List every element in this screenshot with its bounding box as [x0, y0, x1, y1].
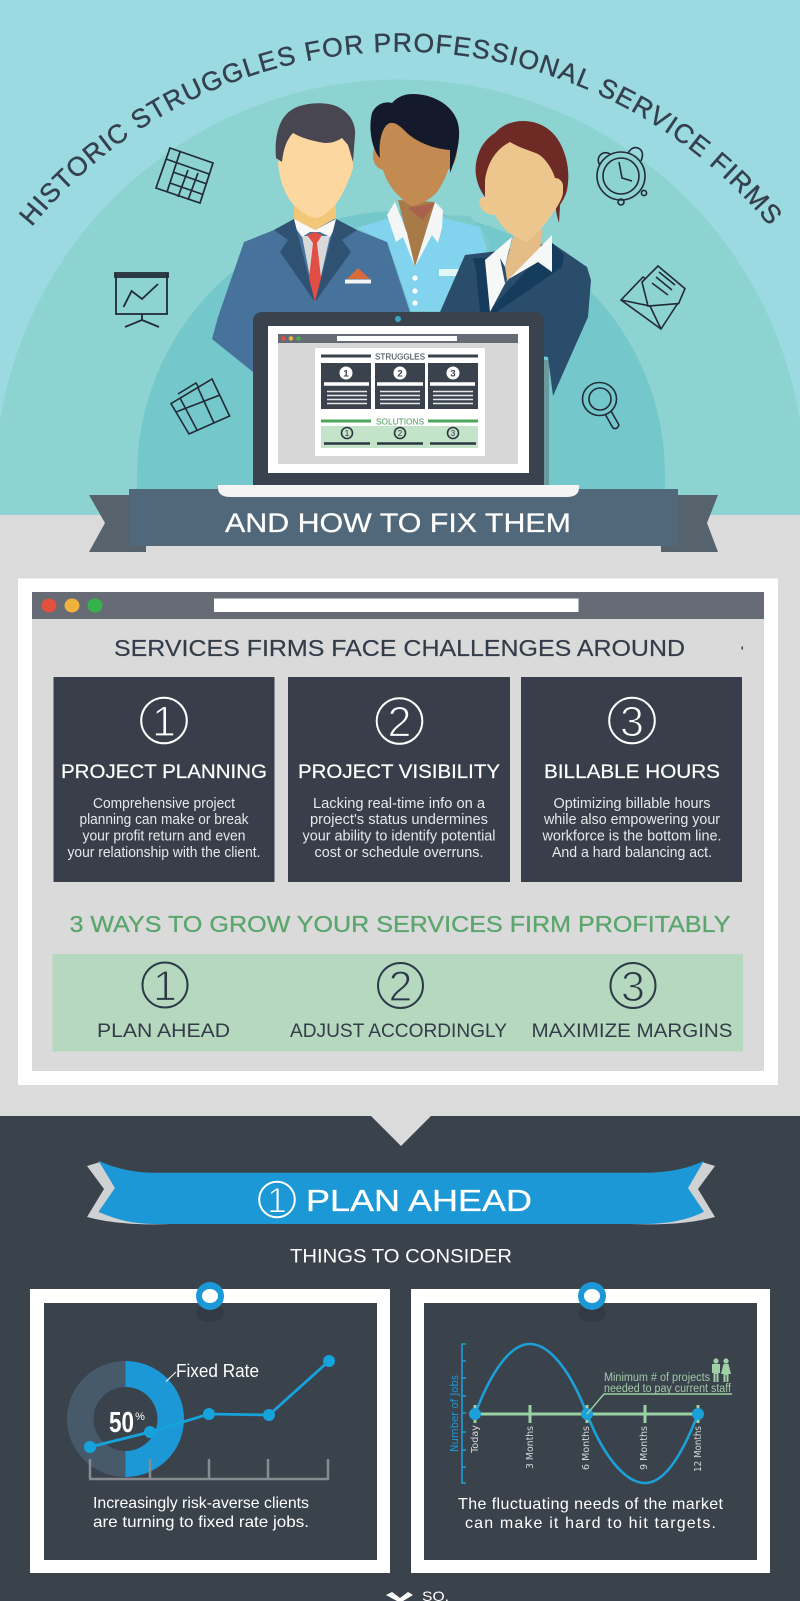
mini struggle cards: 2: [397, 368, 403, 380]
caption: Increasingly risk-averse clients: [93, 1495, 309, 1512]
card heading: PROJECT VISIBILITY: [298, 761, 500, 783]
hero sky: [0, 0, 800, 515]
x axis labels: [470, 1425, 704, 1472]
solution 1: plan ahead: [97, 962, 230, 1042]
hero backdrop arcs: [0, 79, 800, 515]
number badge 2: [377, 698, 422, 746]
card body text: Comprehensive project: [93, 796, 235, 812]
laptop screen: [268, 326, 529, 473]
ribbon: and how to fix them: [89, 485, 718, 552]
ribbon text: AND HOW TO FIX THEM: [225, 508, 571, 538]
icon: folded map: [171, 379, 230, 434]
card body text: planning can make or break: [80, 812, 249, 828]
mini solutions panel: 3: [451, 429, 456, 438]
card body text: Optimizing billable hours: [554, 796, 710, 812]
card body text: project's status undermines: [310, 812, 488, 828]
card: billable hours: [521, 677, 742, 882]
icon: alarm clock: [597, 148, 647, 205]
minimum projects callout: [587, 1372, 732, 1414]
number badge 3: [609, 698, 655, 746]
card body text: your profit return and even: [82, 828, 246, 844]
solution 3: maximize margins: 3: [621, 963, 645, 1011]
mini struggles heading: [321, 352, 478, 362]
laptop camera: [395, 316, 401, 322]
pin: [578, 1282, 606, 1322]
x axis labels: 12 Months: [693, 1426, 704, 1472]
solution 1: plan ahead: PLAN AHEAD: [97, 1020, 230, 1042]
card body text: Lacking real-time info on a: [313, 796, 486, 812]
caption: [93, 1495, 309, 1531]
icon: staff figures: [712, 1358, 731, 1382]
caption: The fluctuating needs of the market: [458, 1496, 724, 1513]
solution 2: adjust accordingly: 2: [389, 963, 412, 1011]
person: man in shirt behind: [340, 94, 490, 311]
line chart: [84, 1355, 335, 1453]
panel: fixed rate: [30, 1282, 390, 1573]
panel: market fluctuation: [411, 1282, 770, 1573]
minimum projects callout: needed to pay current staff: [604, 1383, 732, 1395]
solution 2: adjust accordingly: ADJUST ACCORDINGLY: [290, 1020, 507, 1042]
card body text: workforce is the bottom line.: [542, 828, 722, 844]
mini solutions heading: [321, 418, 478, 426]
solution 3: maximize margins: MAXIMIZE MARGINS: [532, 1020, 732, 1042]
caption: [458, 1496, 724, 1532]
mini struggle cards: 3: [450, 368, 456, 380]
x axis labels: Today: [470, 1425, 481, 1454]
icon: presentation board: [115, 273, 168, 327]
card body text: cost or schedule overruns.: [314, 845, 484, 861]
banner number: 1: [267, 1182, 287, 1220]
solution 3: maximize margins: [532, 963, 732, 1042]
chart axis: [89, 1459, 329, 1479]
card body text: And a hard balancing act.: [552, 845, 712, 861]
y axis: [449, 1344, 466, 1483]
laptop base: [218, 485, 579, 497]
mini solutions panel: 1: [345, 429, 350, 438]
caption: are turning to fixed rate jobs.: [93, 1514, 309, 1531]
number badge 3: 3: [620, 698, 644, 746]
challenges heading: SERVICES FIRMS FACE CHALLENGES AROUND: [114, 635, 685, 661]
subheading: THINGS TO CONSIDER: [290, 1246, 512, 1268]
x axis labels: 3 Months: [525, 1426, 536, 1469]
card heading: PROJECT PLANNING: [61, 761, 267, 783]
number badge 1: [141, 698, 187, 746]
donut chart: %: [135, 1411, 145, 1423]
dark background: [0, 1116, 800, 1601]
card body text: your relationship with the client.: [68, 845, 260, 861]
donut chart: 50: [109, 1407, 134, 1439]
curve markers: [469, 1408, 704, 1420]
sine curve: [475, 1344, 698, 1483]
hero panel: [0, 0, 800, 552]
banner number: [259, 1182, 295, 1220]
mini struggles heading: STRUGGLES: [375, 352, 425, 362]
icon: magnifying glass: [582, 382, 619, 429]
solution 2: adjust accordingly: [290, 963, 507, 1042]
caption: can make it hard to hit targets.: [465, 1515, 716, 1532]
title: HISTORIC STRUGGLES FOR PROFESSIONAL SERVICE FIRMS: [18, 33, 781, 226]
card body text: [302, 796, 496, 861]
x axis labels: 9 Months: [639, 1426, 650, 1470]
banner back folds: [87, 1162, 715, 1224]
card body text: [542, 796, 722, 861]
card: project visibility: [288, 677, 510, 882]
browser panel: [18, 578, 778, 1085]
solutions panel: [52, 954, 743, 1052]
person: woman in navy jacket: [440, 121, 591, 485]
card heading: BILLABLE HOURS: [544, 761, 720, 783]
arrow: section pointer: [371, 1116, 431, 1146]
card body text: your ability to identify potential: [302, 828, 496, 844]
minimum projects callout: Minimum # of projects: [604, 1372, 710, 1384]
solution 1: plan ahead: 1: [153, 962, 177, 1010]
panel frame: [30, 1289, 390, 1573]
mini solutions panel: 2: [398, 429, 403, 438]
number badge 2: 2: [388, 698, 411, 746]
panel frame: [411, 1289, 770, 1573]
mini struggle cards: [321, 363, 478, 409]
x axis labels: 6 Months: [581, 1426, 592, 1470]
browser toolbar: [32, 592, 764, 619]
card body text: while also empowering your: [543, 812, 720, 828]
laptop body: [253, 312, 544, 485]
laptop: [253, 312, 544, 485]
number badge 1: 1: [152, 698, 176, 746]
pin: [196, 1282, 224, 1322]
donut chart: [67, 1361, 184, 1477]
dark section: [0, 1116, 800, 1601]
banner text: PLAN AHEAD: [306, 1184, 532, 1218]
green heading: 3 WAYS TO GROW YOUR SERVICES FIRM PROFITABLY: [70, 911, 731, 937]
banner ribbon: [98, 1161, 704, 1224]
mini struggle cards: 1: [343, 368, 349, 380]
y axis: Number of Jobs: [449, 1375, 461, 1452]
banner: plan ahead: [87, 1161, 715, 1224]
icon: envelope with letter: [621, 266, 685, 329]
mini solutions panel: [321, 426, 478, 448]
icon: calendar: [156, 148, 213, 203]
fixed rate label: Fixed Rate: [176, 1361, 259, 1381]
card: project planning: [54, 677, 274, 882]
card body text: [68, 796, 260, 861]
mini solutions heading: SOLUTIONS: [376, 418, 424, 426]
icon: chevron: [386, 1592, 413, 1601]
target line: [475, 1405, 698, 1423]
next section pointer: [386, 1588, 449, 1601]
person: man in blue suit: [212, 103, 411, 400]
browser frame: [18, 578, 778, 1085]
